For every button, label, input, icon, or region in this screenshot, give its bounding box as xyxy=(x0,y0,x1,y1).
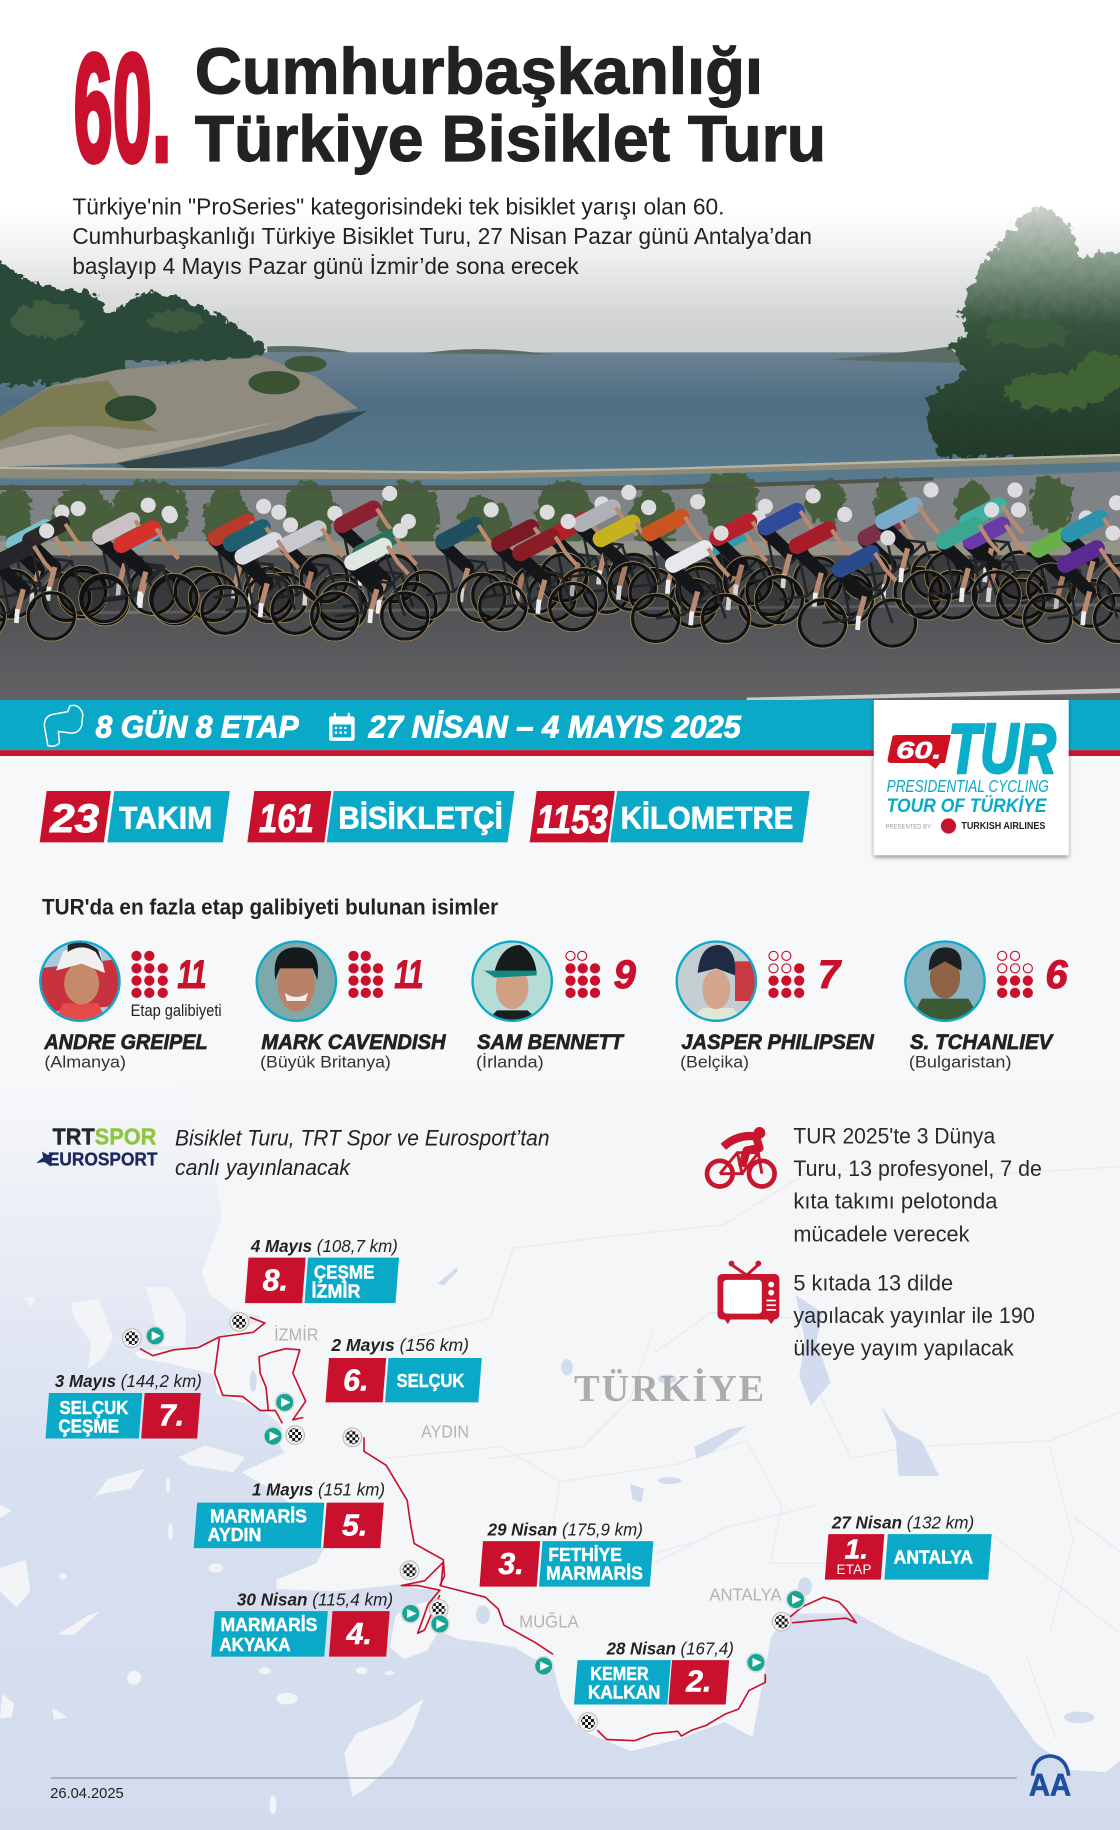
logo card xyxy=(874,700,1069,855)
asphalt road xyxy=(0,555,1120,701)
stage 5 label: AYDIN xyxy=(208,1524,261,1545)
stage 8 label: ÇEŞME xyxy=(314,1262,374,1283)
logo: 60 badge: 60. xyxy=(896,737,942,764)
country: (İrlanda) xyxy=(476,1053,544,1072)
country: (Bulgaristan) xyxy=(909,1054,1012,1072)
icon: television xyxy=(718,1261,779,1324)
rider: Jasper Philipsen xyxy=(676,940,875,1072)
finish markers xyxy=(122,1313,791,1731)
title line 2: Türkiye Bisiklet Turu xyxy=(195,102,826,175)
stage 5 label: MARMARİS xyxy=(210,1506,307,1527)
footer rule xyxy=(51,1777,1017,1779)
city label: Izmir: İZMİR xyxy=(274,1325,319,1345)
stage 2 label: 28 Nisan (167,4) xyxy=(606,1638,734,1658)
win dots xyxy=(348,951,383,998)
rider: Mark Cavendish xyxy=(256,940,446,1072)
photo: peloton on coastal road xyxy=(0,0,1120,701)
logo: Eurosport: EUROSPORT xyxy=(48,1149,158,1170)
stage 6 label: SELÇUK xyxy=(397,1370,465,1391)
stage 2 label: KEMER xyxy=(590,1663,649,1684)
logo: Anadolu Agency: AA xyxy=(1029,1767,1071,1803)
logo: sponsor: TURKISH AIRLINES xyxy=(961,821,1046,832)
broadcast note xyxy=(175,1126,550,1180)
broadcast note: Bisiklet Turu, TRT Spor ve Eurosport’tan xyxy=(175,1126,550,1151)
right trees xyxy=(926,203,1120,457)
route line xyxy=(140,1317,856,1741)
icon: red cyclist xyxy=(707,1127,775,1187)
city label: Mugla: MUĞLA xyxy=(519,1611,579,1632)
stage 4 label: 4. xyxy=(346,1618,372,1651)
start markers xyxy=(146,1327,805,1675)
icon: calendar xyxy=(329,713,355,741)
name: SAM BENNETT xyxy=(477,1031,625,1054)
guardrail xyxy=(0,454,1120,480)
stage 7 label xyxy=(46,1371,202,1439)
country: (Almanya) xyxy=(44,1054,126,1072)
city label: Turkiye: TÜRKİYE xyxy=(574,1368,764,1410)
stage 1 label xyxy=(825,1512,992,1580)
logo: TRT Spor: TRTSPOR xyxy=(52,1124,156,1150)
cyclists xyxy=(0,482,1120,648)
win count: 6 xyxy=(1045,953,1068,997)
logo: sponsor: PRESENTED BY xyxy=(886,823,932,830)
broadcaster logos xyxy=(36,1124,158,1170)
stage 7 label: SELÇUK xyxy=(59,1397,129,1418)
stage 4 label: 30 Nisan (115,4 km) xyxy=(237,1589,393,1609)
info band xyxy=(0,700,1120,756)
footer date: 26.04.2025 xyxy=(50,1786,124,1802)
stage 7 label: 7. xyxy=(159,1400,184,1433)
logo: 60 badge xyxy=(888,735,951,769)
logo: presidential cycling: PRESIDENTIAL CYCLING xyxy=(887,776,1049,796)
stat: 1153 kilometre xyxy=(530,791,810,842)
logo: TUR wordmark: TUR xyxy=(948,709,1056,787)
broadcast note: canlı yayınlanacak xyxy=(175,1155,352,1180)
stage 8 label: İZMİR xyxy=(312,1280,361,1301)
stage 5 label xyxy=(194,1480,385,1548)
stage 1 label: 1. xyxy=(845,1534,868,1565)
stat: 161 bisikletci xyxy=(247,791,515,842)
stage 2 label: KALKAN xyxy=(588,1682,660,1703)
text: broadcast reach xyxy=(793,1270,1035,1361)
portrait xyxy=(471,940,553,1022)
text: broadcast reach: yapılacak yayınlar ile 190 xyxy=(793,1303,1035,1328)
icon: route xyxy=(44,705,83,746)
win dots xyxy=(565,951,600,998)
photo sea xyxy=(0,352,1120,492)
portrait xyxy=(256,940,337,1022)
win dots xyxy=(997,951,1033,998)
stat: 23 takim xyxy=(40,791,230,842)
map sea xyxy=(0,1085,1120,1830)
intro paragraph: Cumhurbaşkanlığı Türkiye Bisiklet Turu, 27 Nisan Pazar günü Antalya’dan xyxy=(72,223,812,249)
rider: S. Tchanliev xyxy=(904,940,1068,1072)
stat: 161 bisikletci: 161 xyxy=(259,797,314,841)
map: Western and Southern Turkiye xyxy=(0,1085,1120,1830)
distant islands xyxy=(267,346,964,363)
caption: Etap galibiyeti xyxy=(131,1002,222,1020)
stage 3 label: 29 Nisan (175,9 km) xyxy=(487,1519,643,1539)
stage 4 label: MARMARİS xyxy=(220,1614,317,1635)
portrait xyxy=(39,940,121,1022)
country: (Büyük Britanya) xyxy=(260,1054,391,1072)
duration text: 8 GÜN 8 ETAP xyxy=(96,708,300,744)
stat: 23 takim: 23 xyxy=(49,797,99,841)
win dots xyxy=(131,951,168,998)
stage 3 label: 3. xyxy=(498,1548,524,1581)
cliff xyxy=(0,356,368,469)
stat: 161 bisikletci: BİSİKLETÇİ xyxy=(338,799,503,835)
stage 5 label: 1 Mayıs (151 km) xyxy=(252,1480,385,1500)
date range text: 27 NİSAN – 4 MAYIS 2025 xyxy=(368,708,741,744)
map lakes xyxy=(250,1267,1094,1723)
logo: sponsor xyxy=(886,818,1046,834)
intro paragraph: başlayıp 4 Mayıs Pazar günü İzmir’de sona erecek xyxy=(72,253,579,279)
name: JASPER PHILIPSEN xyxy=(681,1031,875,1054)
win count: 11 xyxy=(394,953,423,997)
city label: Antalya: ANTALYA xyxy=(709,1585,782,1605)
stage 3 label: MARMARİS xyxy=(546,1563,643,1584)
text: broadcast reach: ülkeye yayım yapılacak xyxy=(793,1336,1015,1361)
stat: 1153 kilometre: 1153 xyxy=(537,798,608,842)
portrait xyxy=(676,940,758,1022)
country: (Belçika) xyxy=(680,1054,749,1072)
concrete barrier xyxy=(0,541,1120,557)
stat: 1153 kilometre: KİLOMETRE xyxy=(621,799,793,835)
stage 6 label xyxy=(326,1335,482,1402)
stage 8 label: 8. xyxy=(263,1264,288,1297)
stage 3 label: FETHİYE xyxy=(548,1544,622,1565)
far road behind guardrail xyxy=(0,471,1120,553)
stage 2 label xyxy=(574,1638,734,1705)
stage 6 label: 6. xyxy=(343,1365,368,1398)
text: teams: mücadele verecek xyxy=(793,1221,970,1246)
win count: 7 xyxy=(818,953,842,997)
city label: Aydin: AYDIN xyxy=(421,1421,469,1441)
text: 60. xyxy=(74,22,172,194)
map islands xyxy=(0,1287,424,1814)
roadside bushes xyxy=(0,469,1071,560)
stage 4 label: AKYAKA xyxy=(219,1634,291,1655)
name: S. TCHANLIEV xyxy=(910,1031,1054,1054)
map roads and borders xyxy=(350,1167,1120,1738)
stage 1 label: 27 Nisan (132 km) xyxy=(831,1512,974,1532)
stage 1 label: ANTALYA xyxy=(894,1546,973,1567)
stage 7 label: 3 Mayıs (144,2 km) xyxy=(55,1371,202,1391)
text: teams xyxy=(793,1123,1042,1246)
stage 4 label xyxy=(211,1589,393,1657)
stage 8 label: 4 Mayıs (108,7 km) xyxy=(250,1236,398,1256)
left trees xyxy=(0,251,267,385)
intro paragraph: Türkiye'nin "ProSeries" kategorisindeki tek bisiklet yarışı olan 60. xyxy=(72,194,724,220)
rider: Andre Greipel xyxy=(39,940,222,1072)
stage 8 label xyxy=(245,1236,399,1303)
stage 1 label: ETAP xyxy=(836,1562,872,1577)
stat: 23 takim: TAKIM xyxy=(119,799,212,835)
win dots xyxy=(768,951,804,998)
photo sky xyxy=(0,0,1120,362)
rider: Sam Bennett xyxy=(471,940,636,1072)
heading: most stage wins: TUR'da en fazla etap galibiyeti bulunan isimler xyxy=(42,895,499,920)
text: teams: TUR 2025'te 3 Dünya xyxy=(793,1123,996,1148)
stage 6 label: 2 Mayıs (156 km) xyxy=(330,1335,469,1355)
map land xyxy=(134,1085,1120,1772)
portrait xyxy=(904,940,986,1022)
logo: tour of turkiye: TOUR OF TÜRKİYE xyxy=(887,794,1047,817)
intro paragraph xyxy=(72,194,812,279)
stage 3 label xyxy=(480,1519,653,1587)
win count: 11 xyxy=(177,953,207,997)
text: teams: kıta takımı pelotonda xyxy=(793,1189,998,1214)
sea gap between rails xyxy=(385,475,653,490)
stage 2 label: 2. xyxy=(685,1666,711,1699)
name: ANDRE GREIPEL xyxy=(43,1031,208,1054)
stage 7 label: ÇEŞME xyxy=(58,1416,119,1437)
title line 1: Cumhurbaşkanlığı xyxy=(195,34,763,107)
name: MARK CAVENDISH xyxy=(261,1031,446,1054)
win count: 9 xyxy=(614,953,636,997)
stage 5 label: 5. xyxy=(342,1509,367,1542)
text: broadcast reach: 5 kıtada 13 dilde xyxy=(793,1270,953,1295)
text: teams: Turu, 13 profesyonel, 7 de xyxy=(793,1156,1042,1181)
